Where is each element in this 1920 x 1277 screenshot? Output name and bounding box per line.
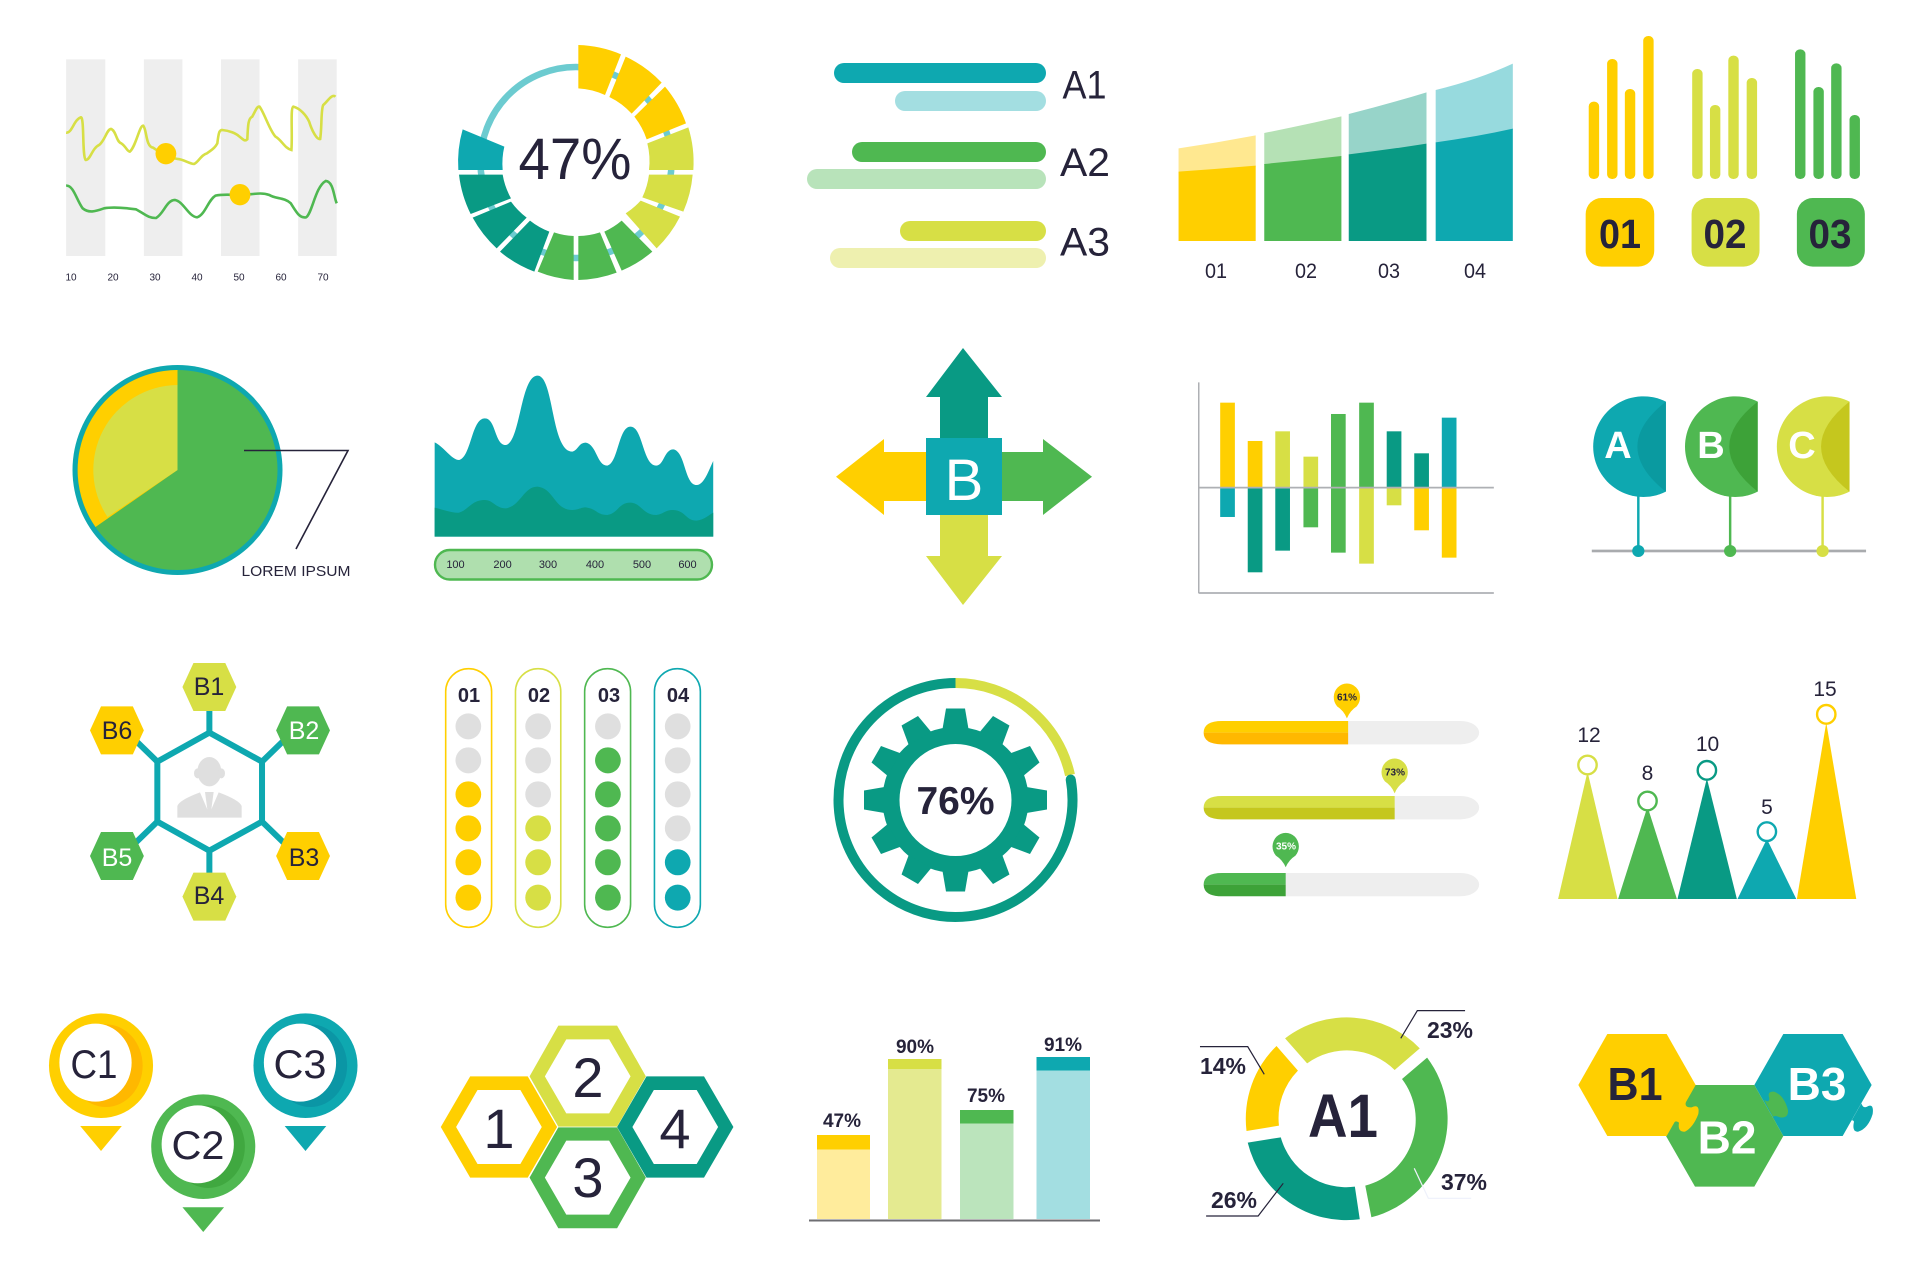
panel: triangle peaks chart: 8 — [1642, 762, 1653, 785]
panel: paired bars A1 A2 A3: A1 — [1062, 64, 1106, 108]
panel: diverging bar chart — [1199, 382, 1494, 593]
panel: percentage bar chart: 75% — [967, 1086, 1005, 1107]
panel: line chart with grey bands: 60 — [275, 272, 287, 284]
panel: hexagon network B1 to B6: B6 — [102, 717, 132, 745]
panel: four-way arrows with B: B — [945, 448, 983, 513]
panel: A B C lollipop markers: B — [1697, 425, 1725, 467]
panel: pie chart with leader and caption — [72, 365, 350, 580]
panel: puzzle hexagons B1 B2 B3: B3 — [1788, 1058, 1846, 1110]
panel: paired bars A1 A2 A3 — [807, 63, 1110, 268]
panel: puzzle hexagons B1 B2 B3: B2 — [1698, 1112, 1756, 1164]
panel: A B C lollipop markers: A — [1604, 425, 1632, 467]
panel: donut A1 with leader labels — [1200, 1011, 1487, 1220]
panel: wave area chart with scale pill: 300 — [539, 559, 557, 571]
panel: hexagon network B1 to B6: B1 — [194, 673, 224, 701]
panel: triangle peaks chart — [1558, 678, 1856, 899]
panel: pie chart with leader and caption: LOREM IPSUM — [242, 563, 350, 580]
panel: triangle peaks chart: 10 — [1696, 733, 1719, 756]
panel: hexagon network B1 to B6: B2 — [289, 717, 319, 745]
panel: percentage bar chart — [809, 1035, 1100, 1222]
panel: map pins C1 C2 C3 — [49, 1013, 358, 1232]
panel: wave area chart with scale pill — [435, 376, 713, 580]
panel: numbered hexagon cluster: 2 — [572, 1046, 604, 1109]
panel: dot columns 01 to 04: 02 — [528, 685, 550, 707]
panel: wave area chart with scale pill: 200 — [493, 559, 512, 571]
panel: puzzle hexagons B1 B2 B3: B1 — [1608, 1058, 1662, 1110]
panel: map pins C1 C2 C3: C3 — [274, 1043, 326, 1087]
panel: puzzle hexagons B1 B2 B3 — [1578, 1034, 1873, 1187]
panel: paired bars A1 A2 A3: A3 — [1060, 220, 1110, 264]
panel: stepped growth area chart: 02 — [1295, 260, 1317, 283]
panel: wave area chart with scale pill: 400 — [586, 559, 604, 571]
panel: map pins C1 C2 C3: C1 — [70, 1043, 118, 1087]
panel: hexagon network B1 to B6: B3 — [289, 844, 319, 872]
panel: stepped growth area chart — [1179, 64, 1513, 283]
panel: progress bars with pins: 61% — [1337, 692, 1357, 704]
panel: percentage bar chart: 47% — [823, 1111, 861, 1132]
panel: wave area chart with scale pill: 600 — [678, 559, 697, 571]
panel: triangle peaks chart: 15 — [1813, 678, 1837, 701]
icon: person silhouette — [177, 757, 242, 818]
panel: progress bars with pins: 73% — [1385, 768, 1405, 778]
panel: map pins C1 C2 C3: C2 — [172, 1124, 224, 1168]
panel: line chart with grey bands: 20 — [107, 272, 119, 284]
panel: grouped thin bars with 01 02 03 badges: 02 — [1704, 211, 1746, 257]
panel: dot columns 01 to 04: 03 — [598, 685, 620, 707]
panel: hexagon network B1 to B6 — [90, 663, 330, 921]
panel: donut A1 with leader labels: 23% — [1427, 1017, 1473, 1043]
panel: line chart with grey bands: 50 — [233, 272, 245, 284]
panel: donut A1 with leader labels: 26% — [1211, 1187, 1257, 1213]
panel: line chart with grey bands: 70 — [317, 272, 329, 284]
panel: line chart with grey bands: 30 — [149, 272, 161, 284]
panel: segmented donut 47% — [458, 45, 694, 280]
panel: grouped thin bars with 01 02 03 badges: 01 — [1599, 211, 1641, 257]
panel: line chart with grey bands: 10 — [65, 272, 77, 284]
panel: donut A1 with leader labels: 37% — [1441, 1169, 1487, 1195]
panel: gear gauge 76%: 76% — [916, 780, 995, 823]
panel: wave area chart with scale pill: 500 — [633, 559, 651, 571]
panel: numbered hexagon cluster: 3 — [572, 1146, 604, 1209]
panel: A B C lollipop markers: C — [1788, 425, 1816, 467]
panel: dot columns 01 to 04: 04 — [667, 685, 690, 707]
panel: stepped growth area chart: 01 — [1205, 260, 1227, 283]
panel: hexagon network B1 to B6: B4 — [194, 882, 224, 910]
panel: line chart with grey bands — [65, 59, 337, 284]
panel: segmented donut 47%: 47% — [518, 127, 632, 192]
panel: donut A1 with leader labels: A1 — [1308, 1082, 1378, 1150]
panel: progress bars with pins — [1204, 684, 1479, 896]
panel: triangle peaks chart: 12 — [1577, 724, 1601, 747]
panel: triangle peaks chart: 5 — [1761, 796, 1773, 819]
panel: donut A1 with leader labels: 14% — [1200, 1053, 1246, 1079]
panel: wave area chart with scale pill: 100 — [446, 559, 465, 571]
panel: numbered hexagon cluster — [441, 1026, 733, 1228]
panel: grouped thin bars with 01 02 03 badges: 03 — [1808, 211, 1852, 257]
panel: numbered hexagon cluster: 1 — [483, 1097, 515, 1160]
panel: dot columns 01 to 04: 01 — [458, 685, 480, 707]
panel: hexagon network B1 to B6: B5 — [102, 844, 132, 872]
panel: stepped growth area chart: 03 — [1378, 260, 1400, 283]
panel: dot columns 01 to 04 — [446, 669, 700, 927]
panel: percentage bar chart: 91% — [1044, 1035, 1082, 1056]
panel: four-way arrows with B — [836, 348, 1092, 605]
panel: A B C lollipop markers — [1592, 396, 1866, 557]
panel: stepped growth area chart: 04 — [1464, 260, 1486, 283]
panel: paired bars A1 A2 A3: A2 — [1060, 141, 1110, 185]
panel: percentage bar chart: 90% — [896, 1037, 934, 1058]
panel: numbered hexagon cluster: 4 — [659, 1097, 691, 1160]
panel: line chart with grey bands: 40 — [191, 272, 203, 284]
panel: progress bars with pins: 35% — [1276, 842, 1296, 852]
panel: gear gauge 76% — [839, 683, 1076, 917]
icon: gear teeth — [864, 708, 1047, 892]
panel: grouped thin bars with 01 02 03 badges — [1586, 36, 1865, 267]
